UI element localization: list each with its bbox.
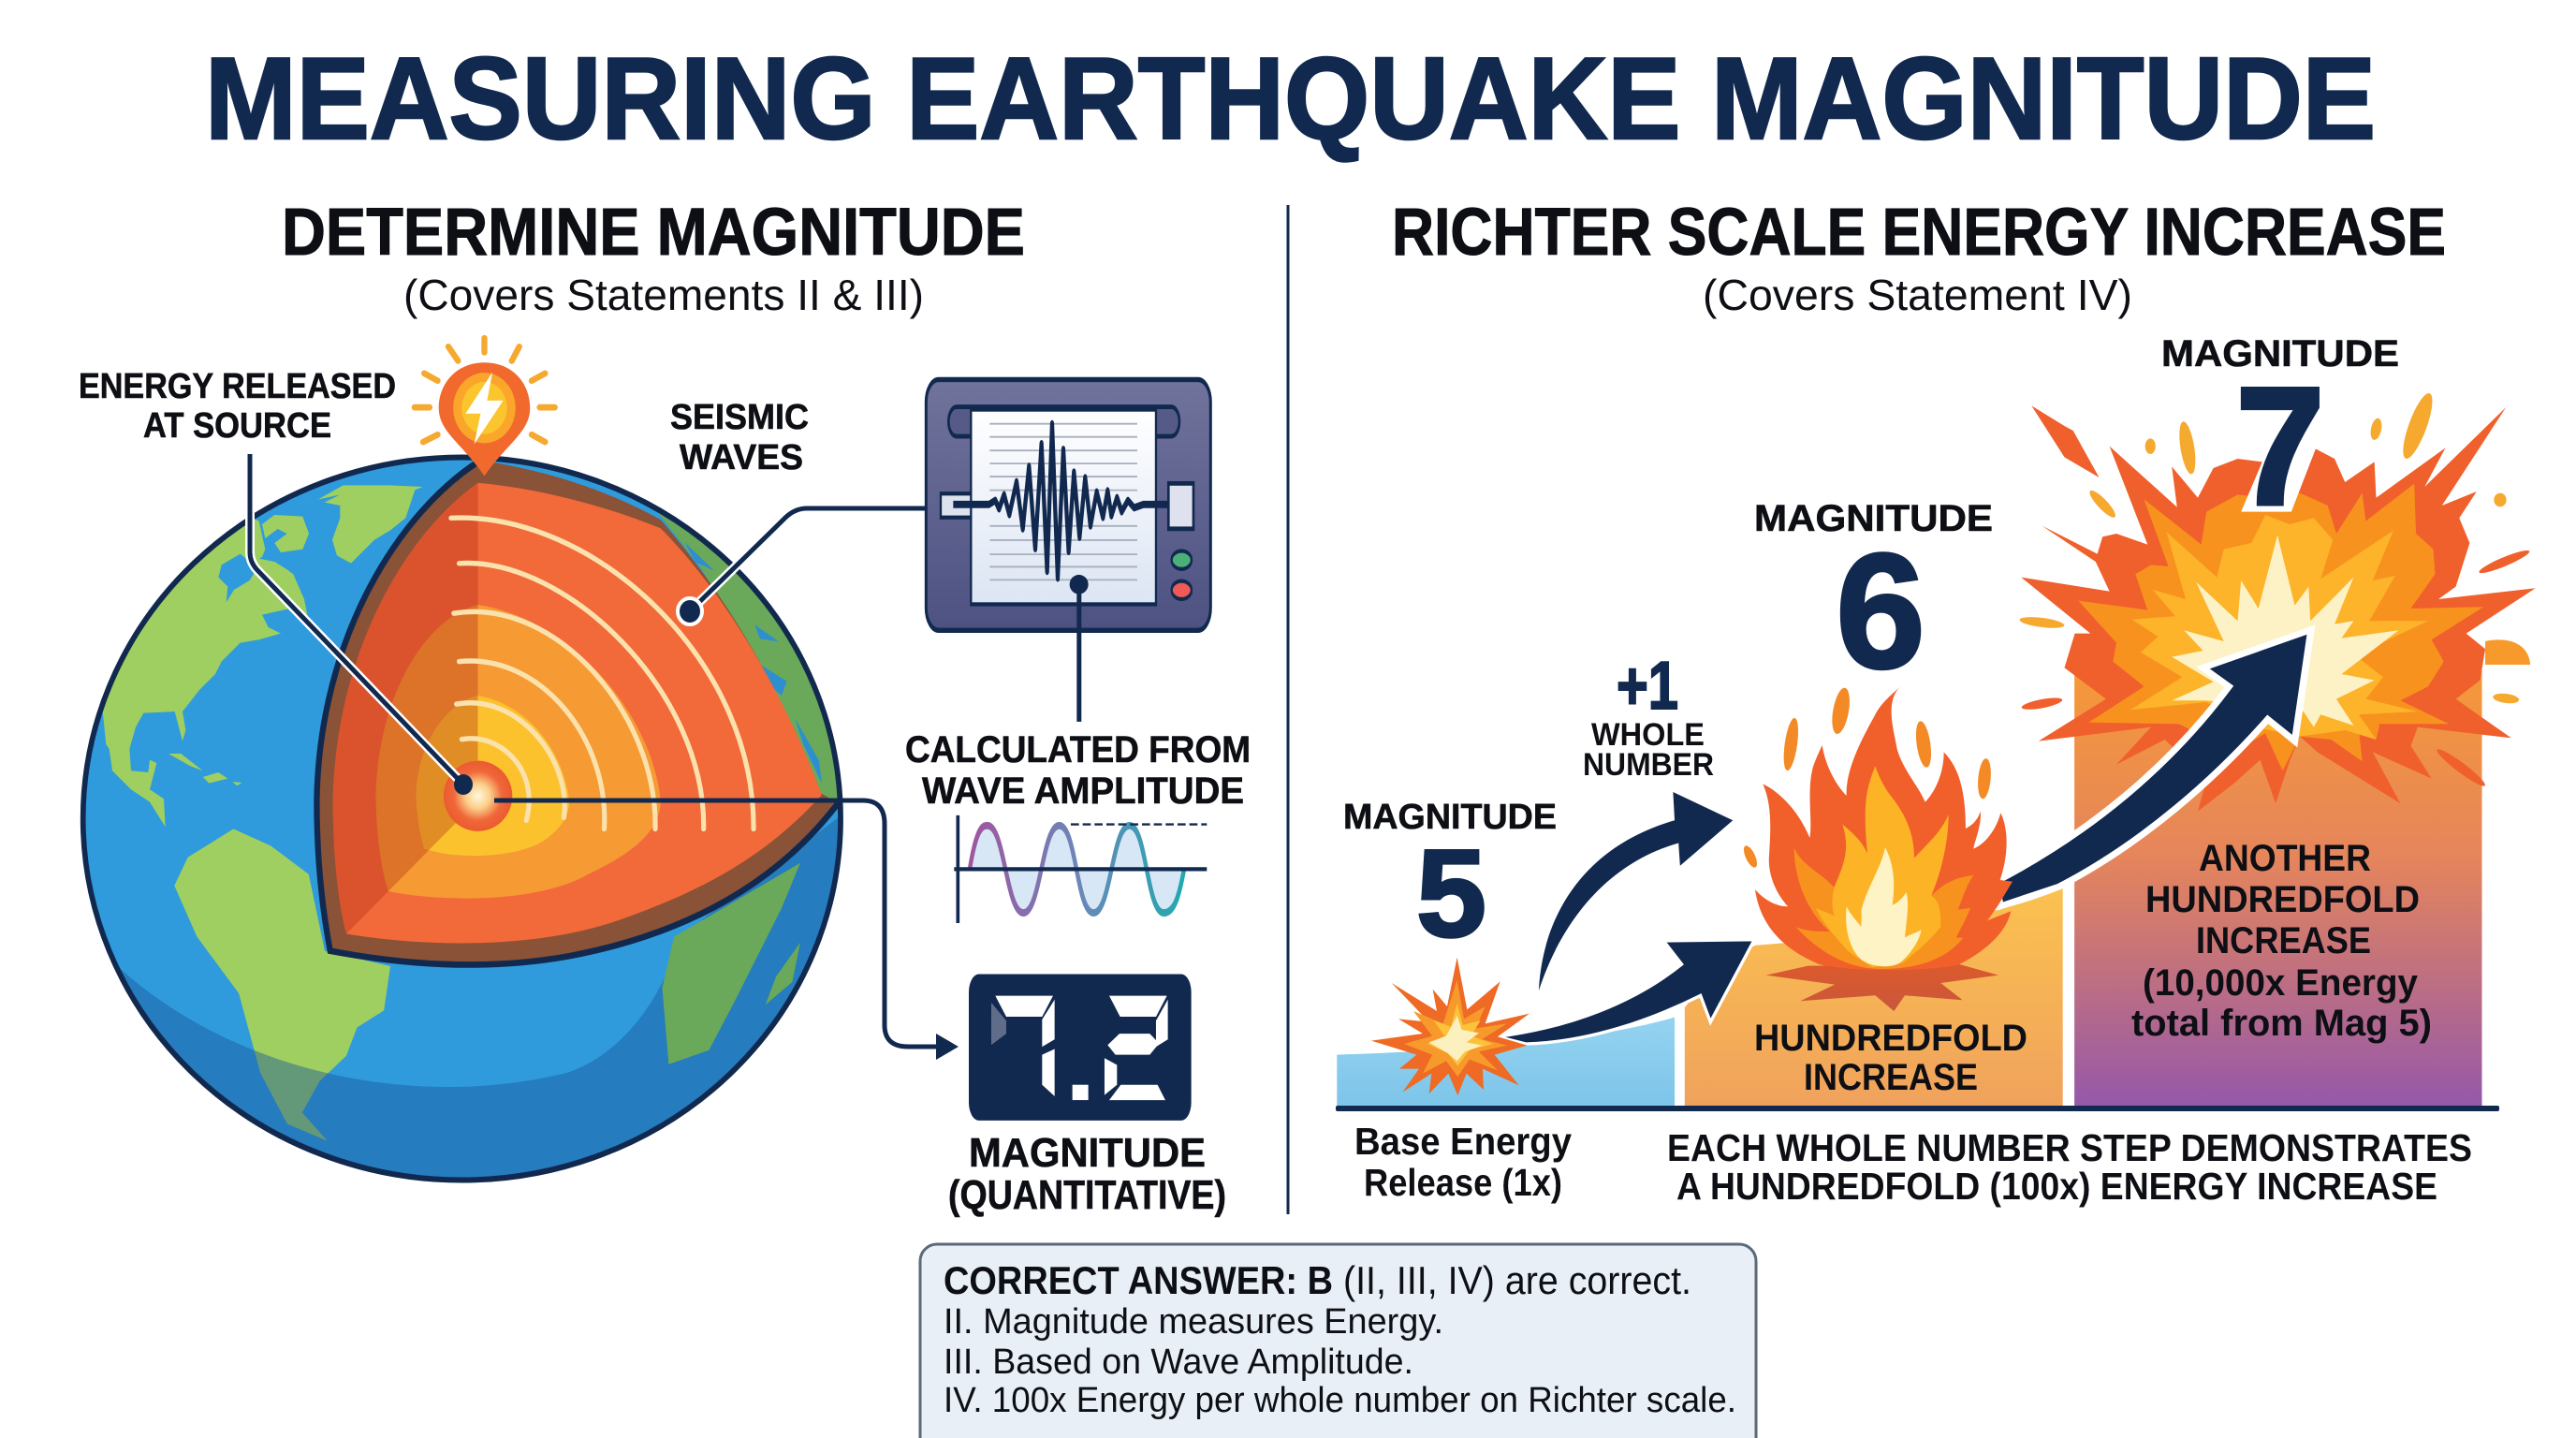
label: calculated from wave amplitude xyxy=(905,729,1251,812)
baseline axis xyxy=(1336,1106,2499,1111)
flame: magnitude 6 xyxy=(1741,686,2012,1011)
digital magnitude display xyxy=(969,975,1192,1121)
cutaway wedge layers xyxy=(316,461,838,965)
label: base energy release: Base Energy xyxy=(1354,1120,1572,1163)
correct answer heading: (II, III, IV) are correct. xyxy=(1343,1258,1691,1302)
title: MEASURING EARTHQUAKE MAGNITUDE xyxy=(205,35,2376,164)
seismograph xyxy=(926,379,1210,722)
label: magnitude quantitative xyxy=(948,1130,1226,1218)
amplitude waveform chart xyxy=(954,815,1207,923)
wedge outline xyxy=(316,461,838,965)
arrow: focus to magnitude display xyxy=(494,800,959,1060)
label: plus one whole number: NUMBER xyxy=(1583,747,1714,783)
earthquake focus xyxy=(444,761,512,831)
label: calculated from wave amplitude: CALCULATED FROM xyxy=(905,729,1251,770)
label: magnitude 5: MAGNITUDE xyxy=(1343,798,1557,837)
label: another hundredfold increase: (10,000x Energy xyxy=(2143,962,2419,1004)
label: base energy release xyxy=(1354,1120,1572,1204)
label: seismic waves xyxy=(670,398,809,477)
ocean xyxy=(83,457,841,1181)
bar: hundredfold xyxy=(1685,888,2063,1106)
status lights xyxy=(1172,550,1192,599)
label: seismic waves: WAVES xyxy=(680,438,803,477)
arrow: magnitude 5 to 6 xyxy=(1498,940,1754,1044)
energy staircase bars xyxy=(1337,655,2482,1106)
statement III: III. Based on Wave Amplitude. xyxy=(944,1343,1413,1382)
energy pin with lightning bolt xyxy=(415,338,555,476)
label: calculated from wave amplitude: WAVE AMPLITUDE xyxy=(922,770,1244,812)
label: magnitude 6: MAGNITUDE xyxy=(1754,498,1993,539)
earth cutaway globe xyxy=(59,338,856,1203)
paper chart xyxy=(971,410,1156,604)
explosion: magnitude 7 xyxy=(1996,390,2536,906)
label: plus one whole number: WHOLE xyxy=(1591,717,1705,753)
heading: richter scale energy increase xyxy=(1392,196,2446,319)
label: plus one whole number: +1 xyxy=(1617,649,1678,724)
label: each whole number step: A HUNDREDFOLD (100x) ENERGY INCREASE xyxy=(1676,1165,2437,1208)
label: magnitude quantitative: (QUANTITATIVE) xyxy=(948,1172,1226,1218)
label: magnitude 7: MAGNITUDE xyxy=(2161,333,2399,374)
correct answer heading: CORRECT ANSWER: B xyxy=(944,1258,1333,1302)
label: energy released at source xyxy=(79,367,396,446)
label: seismic waves: SEISMIC xyxy=(670,398,809,437)
debris sparks xyxy=(2019,390,2531,789)
label: magnitude 7 xyxy=(2161,333,2399,539)
label: base energy release: Release (1x) xyxy=(1364,1161,1562,1204)
label: magnitude 6 xyxy=(1754,498,1993,703)
label: each whole number step xyxy=(1667,1126,2472,1208)
correct answer heading xyxy=(944,1258,1691,1302)
arrow: magnitude 6 to 7 xyxy=(1996,630,2311,906)
lower shadow on globe xyxy=(120,818,839,1178)
bar: base energy xyxy=(1337,1018,1675,1106)
seismic wave arcs xyxy=(451,518,754,829)
label: hundredfold increase: HUNDREDFOLD xyxy=(1754,1018,2027,1059)
label: another hundredfold increase: INCREASE xyxy=(2196,920,2371,961)
spark: magnitude 5 xyxy=(1371,958,1530,1095)
heading: richter scale energy increase: (Covers Statement IV) xyxy=(1703,271,2132,319)
label: another hundredfold increase: ANOTHER xyxy=(2199,838,2371,879)
statement IV: IV. 100x Energy per whole number on Richter scale. xyxy=(944,1381,1736,1420)
flame embers xyxy=(1741,686,1993,870)
continents: the Americas xyxy=(59,485,423,1141)
label: hundredfold increase xyxy=(1754,1018,2027,1098)
label: magnitude quantitative: MAGNITUDE xyxy=(969,1130,1206,1176)
label: energy released at source: AT SOURCE xyxy=(143,406,331,446)
label: magnitude 6: 6 xyxy=(1836,521,1925,703)
callout line: energy source xyxy=(250,454,473,795)
continents: Africa and Europe xyxy=(658,513,838,1064)
label: another hundredfold increase: HUNDREDFOLD xyxy=(2145,879,2420,920)
correct answer box xyxy=(920,1244,1756,1438)
globe outline xyxy=(83,457,841,1181)
callout line: seismic waves xyxy=(678,508,927,624)
seismogram trace xyxy=(953,424,1168,579)
heading: determine magnitude: (Covers Statements II & III) xyxy=(403,271,924,319)
label: plus one whole number xyxy=(1583,649,1714,783)
label: magnitude 7: 7 xyxy=(2236,353,2324,539)
label: another hundredfold increase xyxy=(2131,838,2432,1044)
heading: richter scale energy increase: RICHTER SCALE ENERGY INCREASE xyxy=(1392,196,2446,270)
heading: determine magnitude: DETERMINE MAGNITUDE xyxy=(282,196,1025,270)
label: hundredfold increase: INCREASE xyxy=(1804,1057,1978,1098)
label: magnitude 5 xyxy=(1343,798,1557,963)
label: energy released at source: ENERGY RELEASED xyxy=(79,367,396,406)
bar: another hundredfold xyxy=(2074,655,2482,1106)
label: magnitude 5: 5 xyxy=(1416,825,1486,963)
label: another hundredfold increase: total from Mag 5) xyxy=(2131,1003,2432,1044)
label: each whole number step: EACH WHOLE NUMBER STEP DEMONSTRATES xyxy=(1667,1126,2472,1169)
arrow: whole number step xyxy=(1539,792,1733,990)
statement II: II. Magnitude measures Energy. xyxy=(944,1302,1443,1342)
heading: determine magnitude xyxy=(282,196,1025,319)
